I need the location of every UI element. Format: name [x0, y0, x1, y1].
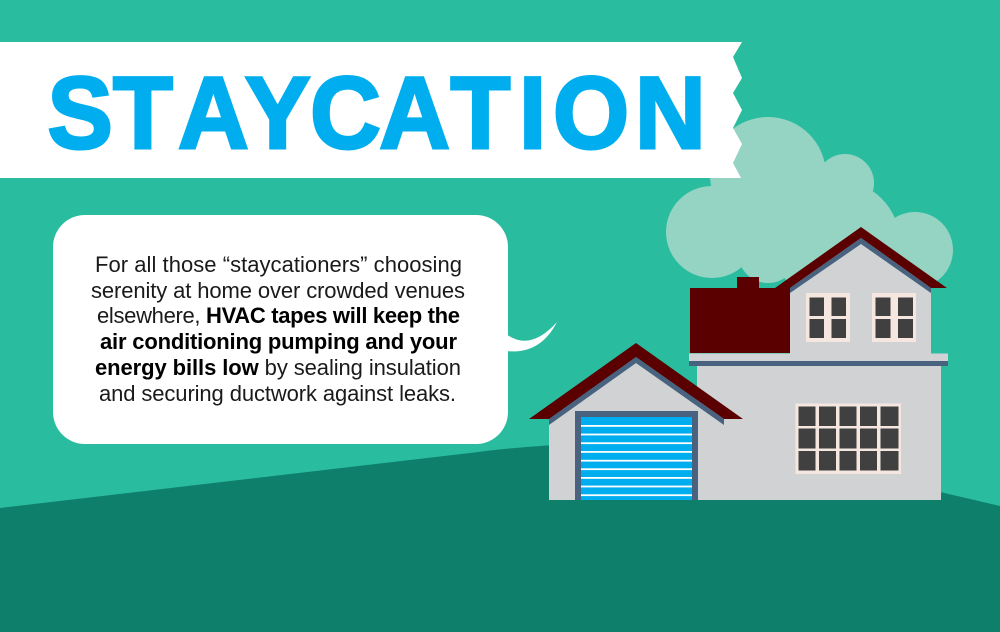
flat dark roof section: [690, 288, 790, 353]
lower window: [796, 404, 901, 474]
body text: [91, 252, 465, 406]
garage roof trim: [549, 357, 724, 425]
upper roof: [775, 227, 947, 288]
body text: air conditioning pumping and your: [100, 329, 457, 354]
body text: energy bills low by sealing insulation: [95, 355, 461, 380]
cloud: [666, 117, 953, 306]
garage door: [575, 411, 698, 500]
upper roof trim: [790, 238, 931, 293]
lower main wall: [697, 365, 941, 500]
title banner: [0, 42, 742, 178]
speech bubble: [53, 215, 557, 444]
speech bubble tail: [506, 322, 557, 351]
upper right window: [872, 293, 916, 342]
upper wall: [790, 244, 931, 354]
body text: For all those “staycationers” choosing: [95, 252, 462, 277]
garage roof: [529, 343, 743, 419]
title: STAYCATION: [48, 56, 706, 170]
floor ledge: [689, 354, 948, 361]
garage wall: [549, 363, 724, 500]
upper left window: [806, 293, 850, 342]
body text: and securing ductwork against leaks.: [99, 381, 456, 406]
body text: serenity at home over crowded venues: [91, 278, 465, 303]
house: [529, 227, 948, 500]
body text: elsewhere, HVAC tapes will keep the: [97, 303, 460, 328]
ground hill: [0, 443, 1000, 632]
chimney: [737, 277, 759, 289]
